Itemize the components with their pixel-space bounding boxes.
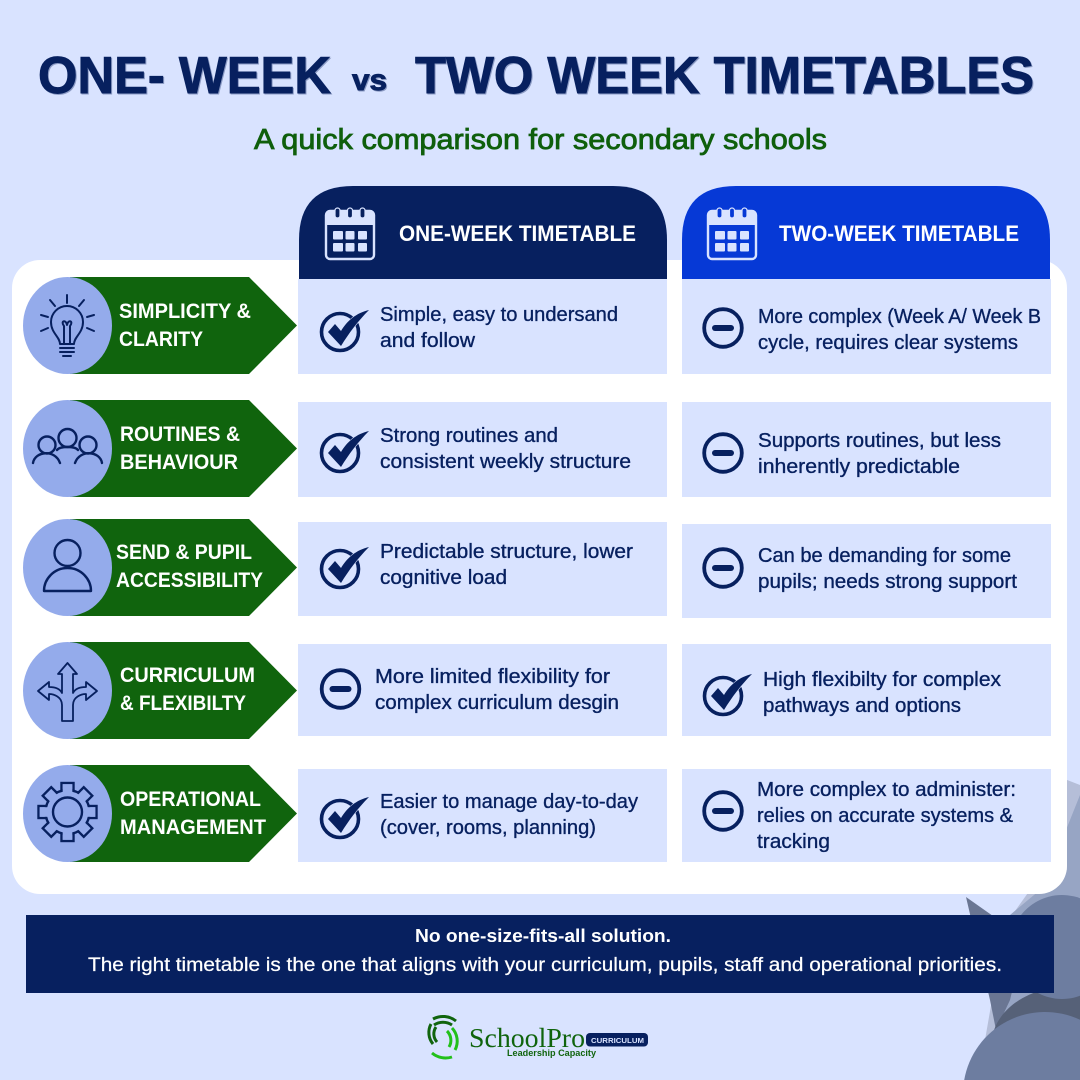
icon: logo swirl xyxy=(429,1016,457,1058)
row 5 label: operational management xyxy=(23,765,297,862)
logo: SchoolPro Curriculum: SchoolPro xyxy=(469,1023,585,1053)
column header: one-week timetable xyxy=(299,186,667,279)
icon: person xyxy=(44,540,91,591)
cell: two-week operations: More complex to administer: xyxy=(757,779,1016,801)
icon: check xyxy=(322,431,369,472)
cell: one-week flexibility: More limited flexibility for xyxy=(375,666,610,688)
cell: two-week flexibility xyxy=(682,644,1051,736)
icon: minus xyxy=(704,434,742,472)
row 3 label: send and pupil accessibility: SEND & PUPIL xyxy=(116,541,252,564)
white table panel xyxy=(12,260,1067,894)
row 4 label: curriculum and flexibility: CURRICULUM xyxy=(120,664,255,687)
cell: two-week simplicity: cycle, requires clear systems xyxy=(758,332,1018,354)
row 4 label: curriculum and flexibility: & FLEXIBILTY xyxy=(120,692,246,715)
cell: one-week simplicity: and follow xyxy=(380,330,476,352)
logo: SchoolPro Curriculum: Leadership Capacity xyxy=(507,1048,597,1059)
cell: one-week operations: Easier to manage day-to-day xyxy=(380,791,638,813)
title xyxy=(38,47,1034,105)
cell: one-week accessibility: cognitive load xyxy=(380,567,507,589)
row 1 label: simplicity and clarity: CLARITY xyxy=(119,328,203,351)
cell: one-week routines: Strong routines and xyxy=(380,425,558,447)
cell: one-week simplicity: Simple, easy to undersand xyxy=(380,304,618,326)
icon: minus xyxy=(704,549,742,587)
cell: one-week operations xyxy=(298,769,667,862)
row 1 label: simplicity and clarity xyxy=(23,277,297,374)
cell: two-week accessibility: Can be demanding for some xyxy=(758,545,1011,567)
row 2 label: routines and behaviour xyxy=(23,400,297,497)
cell: two-week operations xyxy=(682,769,1051,862)
icon: check xyxy=(322,547,369,588)
icon: lightbulb xyxy=(41,295,94,356)
row 2 label: routines and behaviour: BEHAVIOUR xyxy=(120,451,238,474)
cell: one-week flexibility: complex curriculum desgin xyxy=(375,692,619,714)
title: TWO WEEK TIMETABLES xyxy=(415,47,1034,105)
cell: two-week simplicity xyxy=(682,279,1051,374)
conclusion banner: The right timetable is the one that aligns with your curriculum, pupils, staff and operational priorities. xyxy=(88,954,1002,976)
icon: calendar xyxy=(326,208,374,259)
icon: calendar xyxy=(708,208,756,259)
row 3 label: send and pupil accessibility xyxy=(23,519,297,616)
column header: two-week timetable xyxy=(682,186,1050,279)
row 4 label: curriculum and flexibility xyxy=(23,642,297,739)
cell: two-week accessibility xyxy=(682,524,1051,618)
subtitle: A quick comparison for secondary schools xyxy=(254,124,827,156)
icon: branching arrows xyxy=(38,663,97,721)
cell: two-week routines: inherently predictable xyxy=(758,456,960,478)
title: ONE- WEEK xyxy=(38,47,331,105)
logo: SchoolPro Curriculum xyxy=(429,1016,648,1059)
cell: one-week flexibility xyxy=(298,644,667,736)
cell: one-week accessibility xyxy=(298,522,667,616)
cell: two-week flexibility: High flexibilty for complex xyxy=(763,669,1001,691)
row 5 label: operational management: OPERATIONAL xyxy=(120,788,261,811)
conclusion banner xyxy=(26,915,1054,993)
cell: two-week operations: relies on accurate systems & xyxy=(757,805,1014,827)
cell: one-week operations: (cover, rooms, planning) xyxy=(380,817,596,839)
icon: gear xyxy=(38,783,96,841)
icon: minus xyxy=(322,670,359,708)
title: vs xyxy=(352,64,387,97)
cell: one-week accessibility: Predictable structure, lower xyxy=(380,541,633,563)
logo: SchoolPro Curriculum: CURRICULUM xyxy=(591,1038,644,1045)
icon: check xyxy=(322,310,369,350)
cell: two-week operations: tracking xyxy=(757,831,830,853)
icon: three people xyxy=(33,429,102,463)
row 3 label: send and pupil accessibility: ACCESSIBILITY xyxy=(116,569,263,592)
cell: one-week routines xyxy=(298,402,667,497)
cell: two-week simplicity: More complex (Week A/ Week B xyxy=(758,306,1041,328)
row 5 label: operational management: MANAGEMENT xyxy=(120,816,266,839)
decorative shapes bottom right xyxy=(964,778,1080,1080)
cell: one-week simplicity xyxy=(298,279,667,374)
row 1 label: simplicity and clarity: SIMPLICITY & xyxy=(119,300,251,323)
conclusion banner: No one-size-fits-all solution. xyxy=(415,925,671,946)
column header: one-week timetable: ONE-WEEK TIMETABLE xyxy=(399,221,636,246)
icon: minus xyxy=(704,792,742,830)
row 2 label: routines and behaviour: ROUTINES & xyxy=(120,423,240,446)
icon: check xyxy=(322,797,369,838)
icon: check xyxy=(704,674,752,714)
cell: two-week flexibility: pathways and options xyxy=(763,695,961,717)
cell: one-week routines: consistent weekly structure xyxy=(380,451,631,473)
cell: two-week routines xyxy=(682,402,1051,497)
column header: two-week timetable: TWO-WEEK TIMETABLE xyxy=(779,221,1019,246)
cell: two-week routines: Supports routines, but less xyxy=(758,430,1001,452)
icon: minus xyxy=(704,309,742,347)
cell: two-week accessibility: pupils; needs strong support xyxy=(758,571,1017,593)
